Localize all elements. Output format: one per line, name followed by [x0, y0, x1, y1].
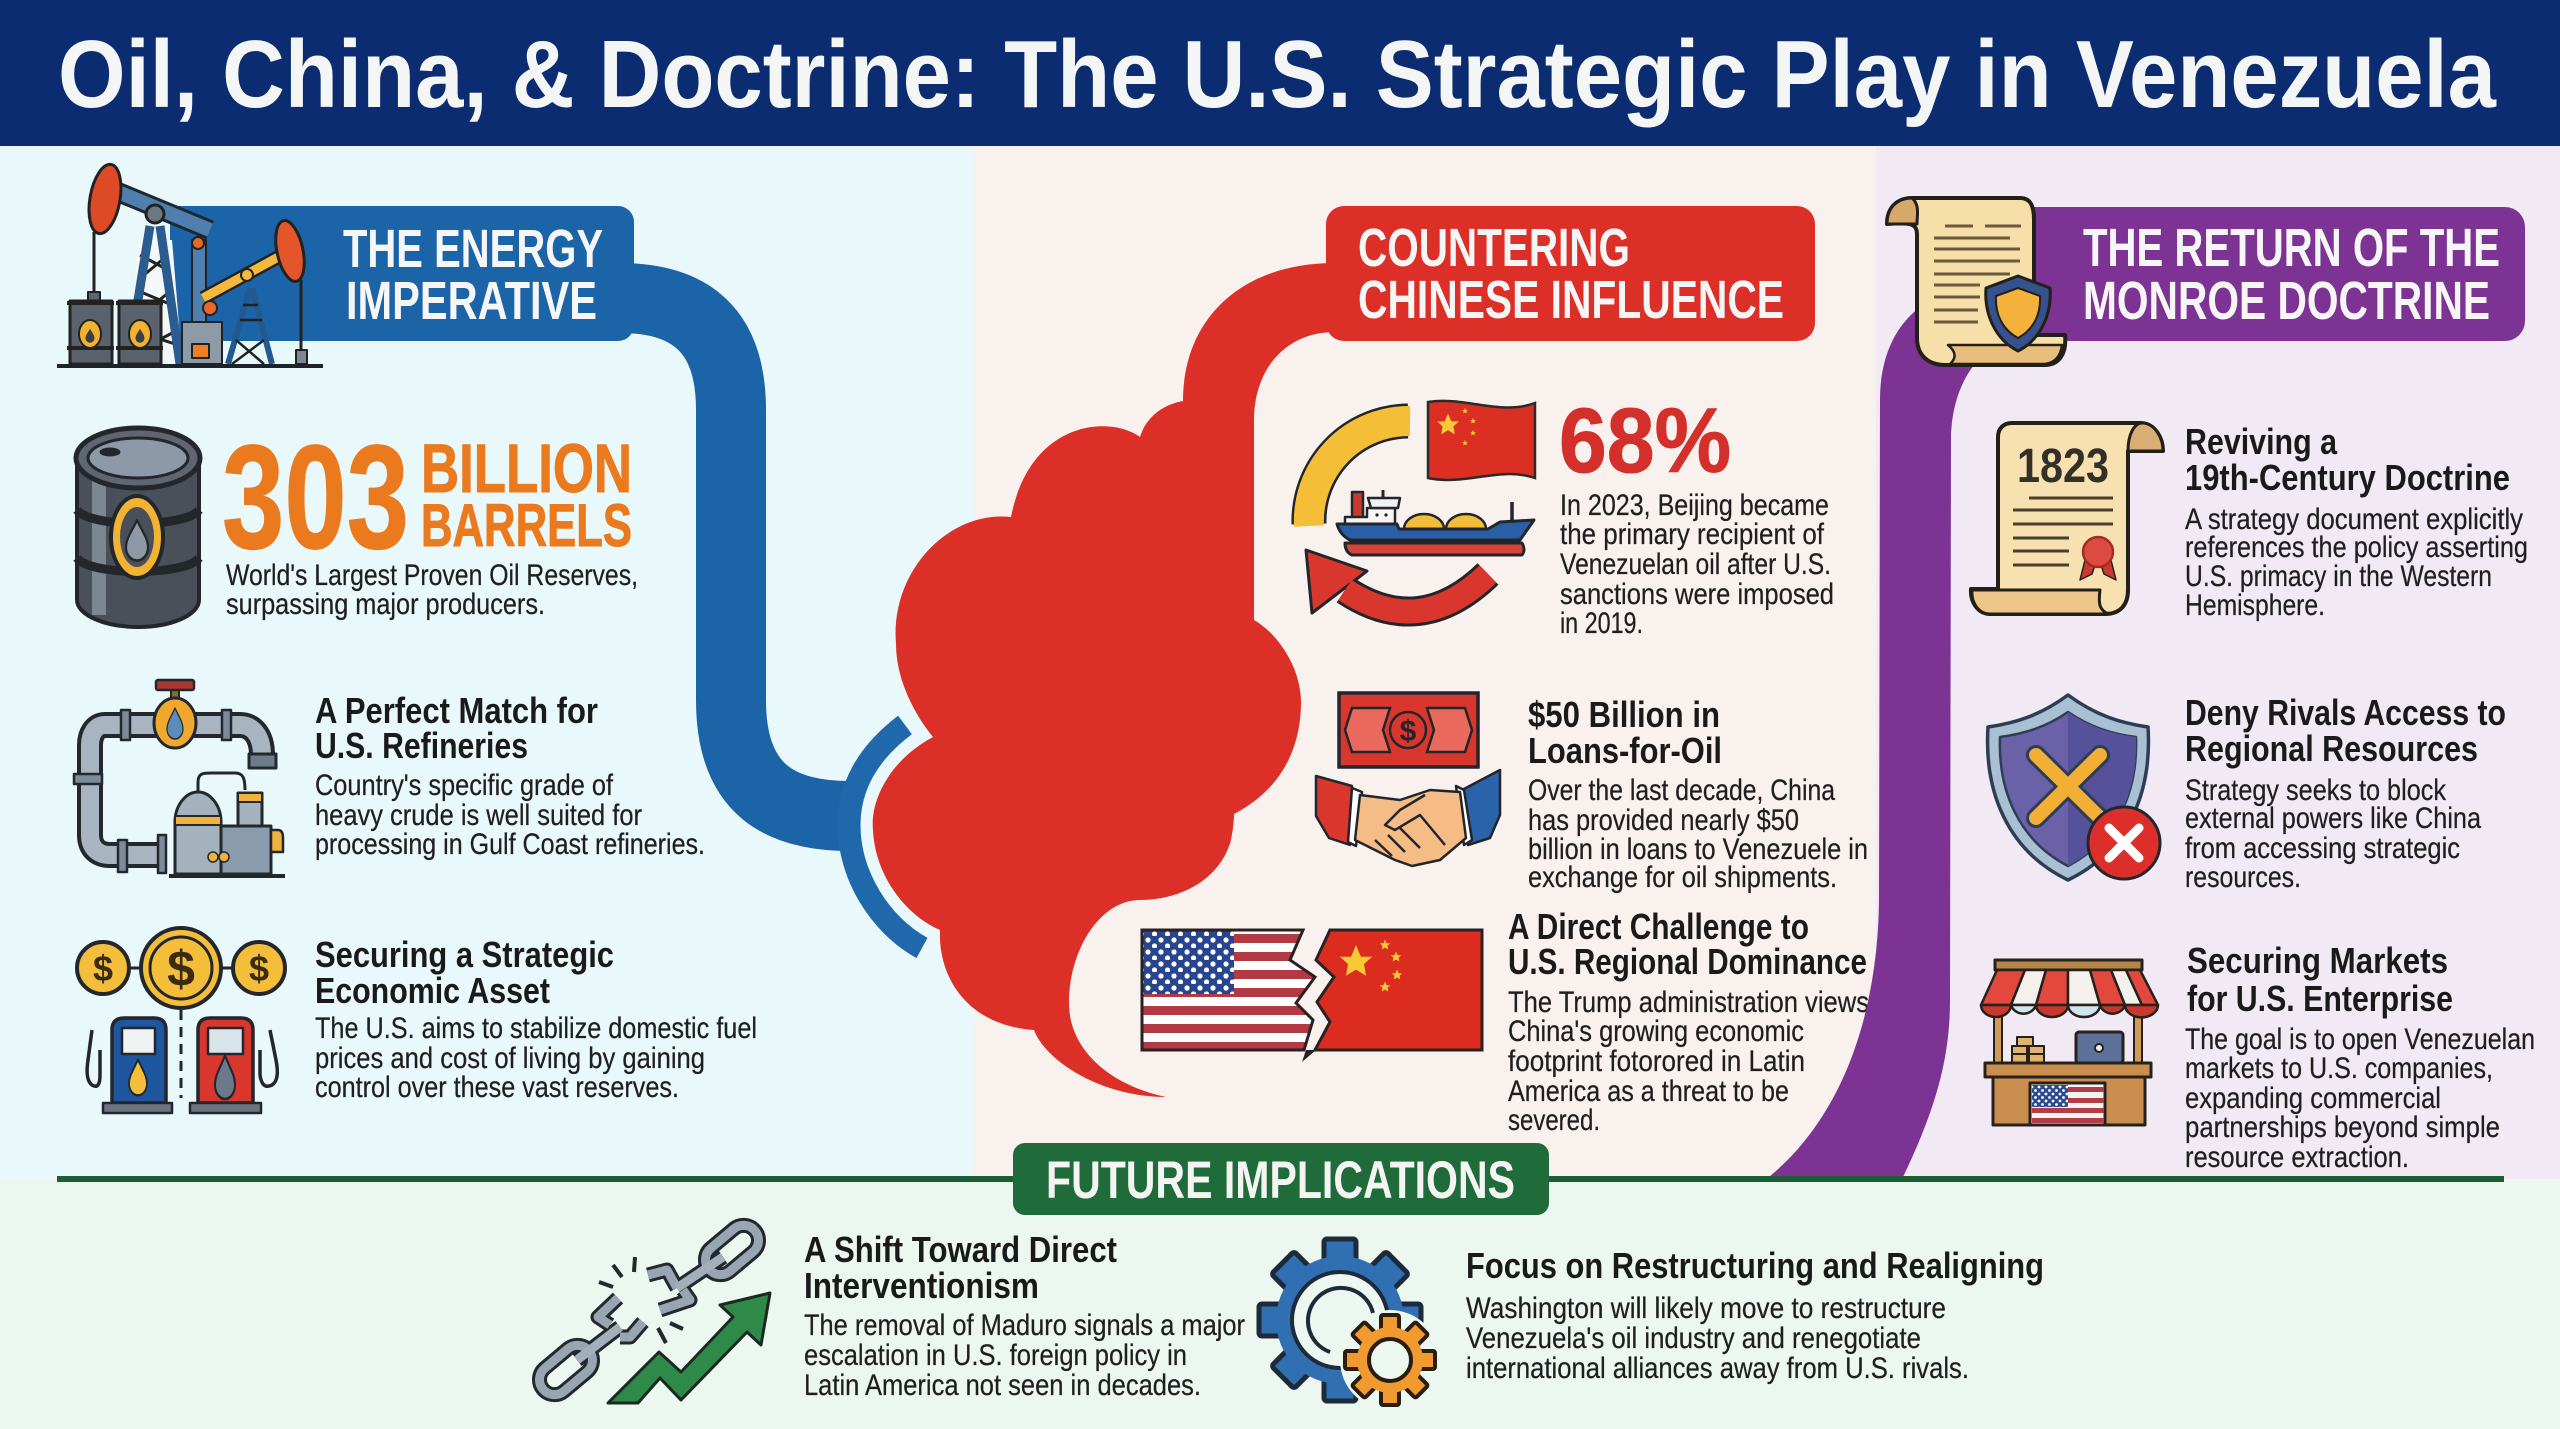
- text: economic asset: prices and cost of living by gaining: [315, 1042, 705, 1075]
- icon: scroll with shield: [1887, 198, 2065, 365]
- icon: 1823 document: [1971, 423, 2163, 614]
- text: securing markets: [2185, 940, 2535, 1174]
- text: loans for oil: billion in loans to Venezuele in: [1528, 833, 1868, 866]
- text: direct challenge: footprint fotorored in Latin: [1508, 1045, 1805, 1078]
- icon: oil barrel: [76, 428, 200, 627]
- text: deny rivals: external powers like China: [2185, 802, 2481, 835]
- icon: coins and fuel pumps: $: [93, 948, 113, 989]
- text: deny rivals: from accessing strategic: [2185, 832, 2460, 865]
- section banner: countering chinese influence: COUNTERING: [1358, 218, 1630, 278]
- text: direct challenge: China's growing economic: [1508, 1015, 1804, 1048]
- text: direct challenge: America as a threat to be: [1508, 1075, 1789, 1108]
- text: deny rivals: Deny Rivals Access to: [2185, 692, 2506, 733]
- icon: china flag: [1428, 401, 1535, 480]
- text: loans for oil: Loans-for-Oil: [1528, 730, 1722, 771]
- icon: return arrow: [1306, 550, 1488, 613]
- text: direct interventionism: Interventionism: [804, 1265, 1039, 1306]
- stat: 303 billion barrels: 303: [222, 415, 409, 580]
- text: reserves: World's Largest Proven Oil Reserves,: [226, 559, 638, 592]
- green divider line: [57, 1176, 2504, 1182]
- text: reserves: [226, 559, 638, 621]
- text: beijing: the primary recipient of: [1560, 518, 1825, 551]
- icon: yellow gauge arc: [1309, 421, 1410, 526]
- icon: breaking chain and rising arrow: [533, 1219, 770, 1403]
- text: restructuring: Venezuela's oil industry and renegotiate: [1466, 1322, 1921, 1355]
- text: direct challenge: U.S. Regional Dominance: [1508, 941, 1867, 982]
- text: restructuring: [1466, 1245, 2044, 1385]
- text: securing markets: for U.S. Enterprise: [2187, 978, 2453, 1019]
- icon: coins and fuel pumps: $: [167, 941, 195, 997]
- blue pipe connector: [620, 298, 850, 816]
- stat: 303 billion barrels: BARRELS: [421, 492, 632, 559]
- stat: 303 billion barrels: BILLION: [421, 430, 632, 507]
- section banner: countering chinese influence: CHINESE INFLUENCE: [1358, 270, 1784, 330]
- text: direct challenge: [1508, 906, 1869, 1137]
- stat: 303 billion barrels: [222, 415, 632, 580]
- icon: coins and fuel pumps: [77, 928, 285, 1113]
- text: loans for oil: $50 Billion in: [1528, 694, 1720, 735]
- text: beijing: In 2023, Beijing became: [1560, 489, 1829, 522]
- text: beijing: Venezuelan oil after U.S.: [1560, 548, 1831, 581]
- text: securing markets: Securing Markets: [2187, 940, 2448, 981]
- icon: coins and fuel pumps: $: [249, 948, 269, 989]
- icon: handshake: [1316, 770, 1500, 866]
- text: direct interventionism: Latin America not seen in decades.: [804, 1369, 1201, 1402]
- icon: pipeline and refinery: [74, 680, 285, 876]
- text: securing markets: markets to U.S. companies,: [2185, 1052, 2493, 1085]
- text: refineries: processing in Gulf Coast refineries.: [315, 828, 705, 861]
- text: deny rivals: Regional Resources: [2185, 728, 2478, 769]
- text: deny rivals: resources.: [2185, 861, 2301, 894]
- section banner: return of the monroe doctrine: [1990, 207, 2525, 341]
- icon: interlocking gears: [1259, 1239, 1440, 1410]
- text: deny rivals: Strategy seeks to block: [2185, 774, 2447, 807]
- text: securing markets: partnerships beyond simple: [2185, 1111, 2500, 1144]
- section banner: countering chinese influence: [1326, 206, 1815, 341]
- text: beijing: sanctions were imposed: [1560, 578, 1834, 611]
- text: restructuring: international alliances away from U.S. rivals.: [1466, 1352, 1969, 1385]
- section banner: energy imperative: IMPERATIVE: [346, 271, 597, 331]
- icon: market stall: [1981, 960, 2158, 1125]
- text: reviving doctrine: U.S. primacy in the Western: [2185, 560, 2492, 593]
- icon: 1823 document: 1823: [2017, 440, 2109, 493]
- text: beijing: [1560, 489, 1834, 640]
- text: direct challenge: The Trump administration views: [1508, 986, 1869, 1019]
- text: securing markets: expanding commercial: [2185, 1082, 2441, 1115]
- text: direct interventionism: escalation in U.S. foreign policy in: [804, 1339, 1187, 1372]
- panel: doctrine background: [1876, 146, 2560, 1179]
- purple pipe connector: [1769, 290, 2020, 1177]
- text: direct interventionism: The removal of Maduro signals a major: [804, 1309, 1245, 1342]
- panel: future implications background: [0, 1179, 2560, 1429]
- text: reviving doctrine: 19th-Century Doctrine: [2185, 457, 2510, 498]
- text: restructuring: Washington will likely move to restructure: [1466, 1292, 1946, 1325]
- text: direct interventionism: A Shift Toward Direct: [804, 1229, 1117, 1270]
- blue ring around cloud: [849, 725, 922, 948]
- text: economic asset: Securing a Strategic: [315, 934, 614, 975]
- icon: oil tanker: [1337, 490, 1534, 555]
- text: reviving doctrine: Hemisphere.: [2185, 589, 2325, 622]
- panel: energy background: [0, 146, 973, 1179]
- text: economic asset: [315, 934, 757, 1104]
- text: refineries: Country's specific grade of: [315, 769, 614, 802]
- text: securing markets: resource extraction.: [2185, 1141, 2409, 1174]
- section banner: energy imperative: THE ENERGY: [343, 219, 603, 279]
- stat: 68 percent: 68%: [1559, 390, 1731, 492]
- text: direct challenge: severed.: [1508, 1104, 1600, 1137]
- text: economic asset: Economic Asset: [315, 970, 550, 1011]
- panel: china background: [973, 146, 1876, 1179]
- heading: future implications: FUTURE IMPLICATIONS: [1046, 1151, 1515, 1210]
- text: economic asset: control over these vast reserves.: [315, 1071, 679, 1104]
- text: reviving doctrine: [2185, 421, 2528, 622]
- text: direct challenge: A Direct Challenge to: [1508, 906, 1809, 947]
- icon: banknote: $: [1400, 715, 1417, 748]
- text: refineries: U.S. Refineries: [315, 725, 528, 766]
- text: reserves: surpassing major producers.: [226, 588, 545, 621]
- text: beijing: in 2019.: [1560, 607, 1643, 640]
- heading: future implications: [1013, 1143, 1549, 1215]
- text: reviving doctrine: Reviving a: [2185, 421, 2338, 462]
- text: refineries: [315, 690, 705, 861]
- text: deny rivals: [2185, 692, 2506, 894]
- icon: banknote: [1339, 693, 1478, 767]
- icon: broken us and china flags: [1142, 930, 1482, 1062]
- section banner: energy imperative: [170, 206, 634, 341]
- text: loans for oil: Over the last decade, China: [1528, 774, 1835, 807]
- red cloud connector: [873, 263, 1335, 1097]
- text: loans for oil: exchange for oil shipments.: [1528, 861, 1837, 894]
- text: refineries: A Perfect Match for: [315, 690, 598, 731]
- text: refineries: heavy crude is well suited for: [315, 799, 642, 832]
- icon: shield with x: [1988, 695, 2160, 880]
- text: direct interventionism: [804, 1229, 1245, 1402]
- text: economic asset: The U.S. aims to stabilize domestic fuel: [315, 1012, 757, 1045]
- icon: oil pump jacks and barrels: [57, 162, 323, 366]
- text: loans for oil: has provided nearly $50: [1528, 804, 1799, 837]
- text: restructuring: Focus on Restructuring and Realigning: [1466, 1245, 2044, 1286]
- text: loans for oil: [1528, 694, 1868, 894]
